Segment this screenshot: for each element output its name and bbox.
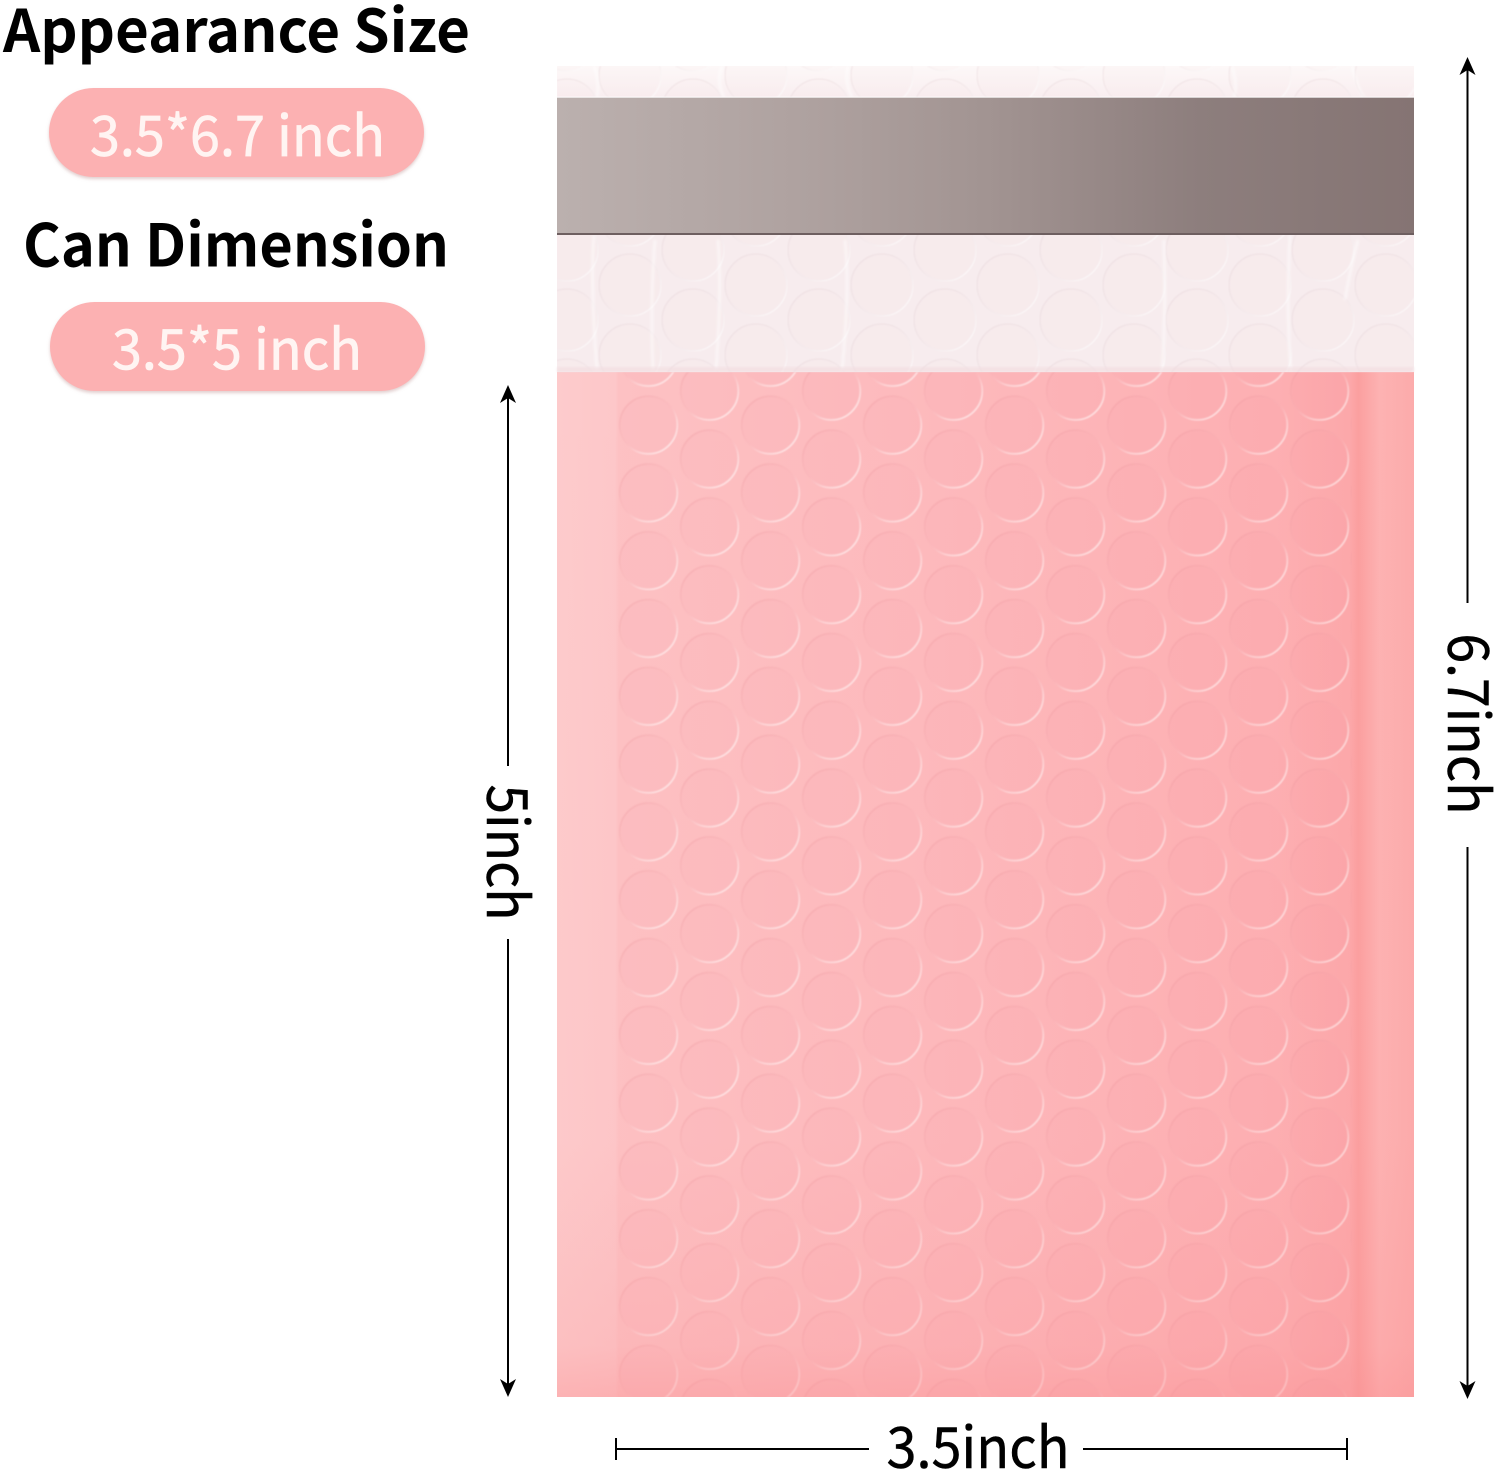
adhesive tape strip [557, 96, 1414, 235]
arrow head up [500, 385, 516, 403]
dimension: 6.7inch height [1431, 57, 1495, 1399]
pill: can dimension value: 3.5*5 inch [112, 306, 362, 386]
arrow head down [1460, 1381, 1476, 1399]
arrow head down [500, 1379, 516, 1397]
dimension: 5inch height [470, 385, 552, 1397]
mailer flap: upper strip [557, 66, 1414, 97]
pill: can dimension value [50, 302, 425, 391]
pink bubble body [557, 367, 1414, 1397]
mailer flap: lower bubble band [557, 235, 1414, 372]
arrow head up [1460, 57, 1476, 75]
label: 5inch: 5inch [470, 784, 552, 920]
bubble mailer [557, 66, 1414, 1397]
flap bubble texture [557, 66, 1414, 372]
pill: appearance size value: 3.5*6.7 inch [90, 92, 385, 173]
heading: can dimension: Can Dimension [23, 198, 449, 284]
